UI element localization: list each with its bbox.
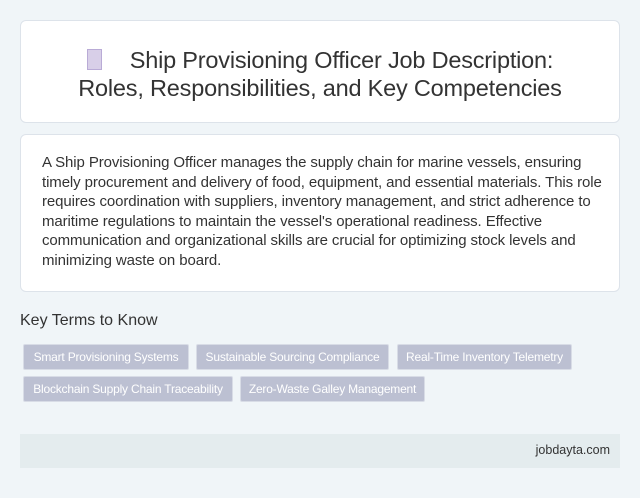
footer text: jobdayta.com <box>536 443 610 457</box>
header card <box>20 20 620 123</box>
description card <box>20 134 620 292</box>
tag 4 <box>23 376 233 402</box>
tag 1: Smart Provisioning Systems <box>34 350 178 364</box>
footer <box>20 434 620 468</box>
icon: document <box>87 49 102 70</box>
tag 2: Sustainable Sourcing Compliance <box>206 350 379 364</box>
tag 5 <box>240 376 425 402</box>
title: Ship Provisioning Officer Job Description: <box>130 47 553 73</box>
tag 1 <box>23 344 189 370</box>
tag 4: Blockchain Supply Chain Traceability <box>33 382 223 396</box>
heading: key terms: Key Terms to Know <box>20 312 158 329</box>
tag 2 <box>196 344 389 370</box>
title <box>78 47 562 101</box>
tag 3: Real-Time Inventory Telemetry <box>406 350 563 364</box>
description text: A Ship Provisioning Officer manages the supply chain for marine vessels, ensuring timely procurement and delivery of food, equipment, and essential materials. This role requires coordination with suppliers, inventory management, and strict adherence to maritime regulations to maintain the vessel's operational readiness. Effective communication and organizational skills are crucial for optimizing stock levels and minimizing waste on board. <box>42 154 602 269</box>
tag 5: Zero-Waste Galley Management <box>249 382 416 396</box>
title: Roles, Responsibilities, and Key Competencies <box>78 75 562 101</box>
tag 3 <box>397 344 572 370</box>
